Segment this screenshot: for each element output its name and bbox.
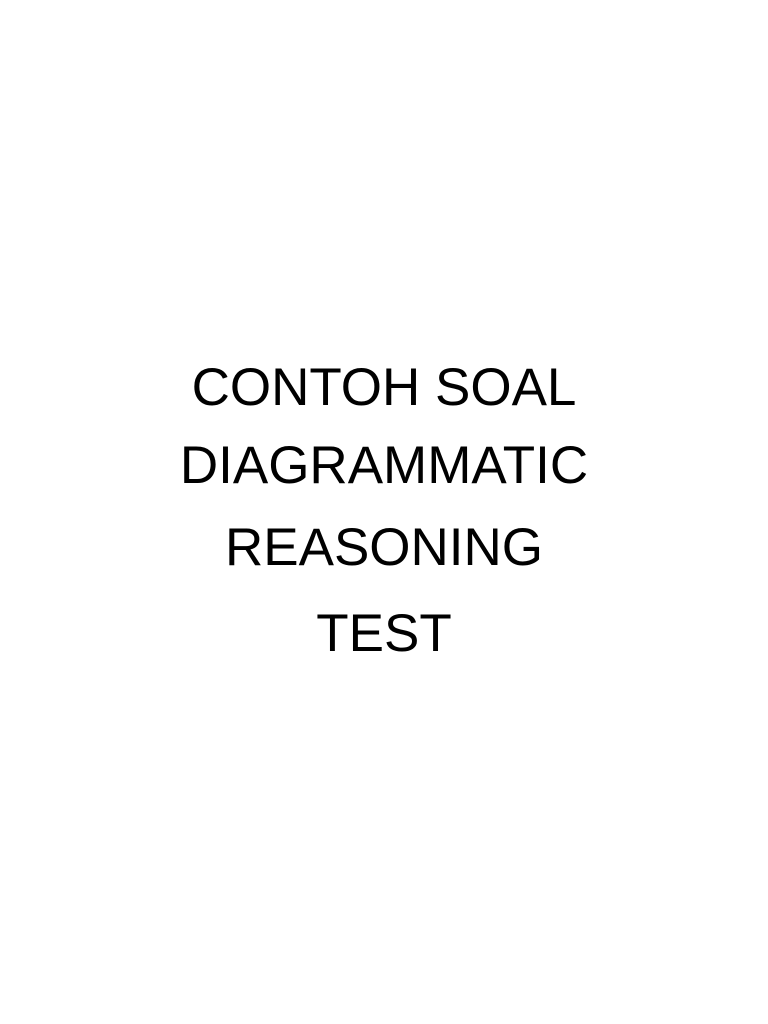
- title line 3: REASONING: [225, 518, 543, 577]
- title: [180, 358, 588, 663]
- title line 4: TEST: [316, 604, 452, 663]
- title line 1: CONTOH SOAL: [192, 358, 576, 417]
- title line 2: DIAGRAMMATIC: [180, 436, 588, 495]
